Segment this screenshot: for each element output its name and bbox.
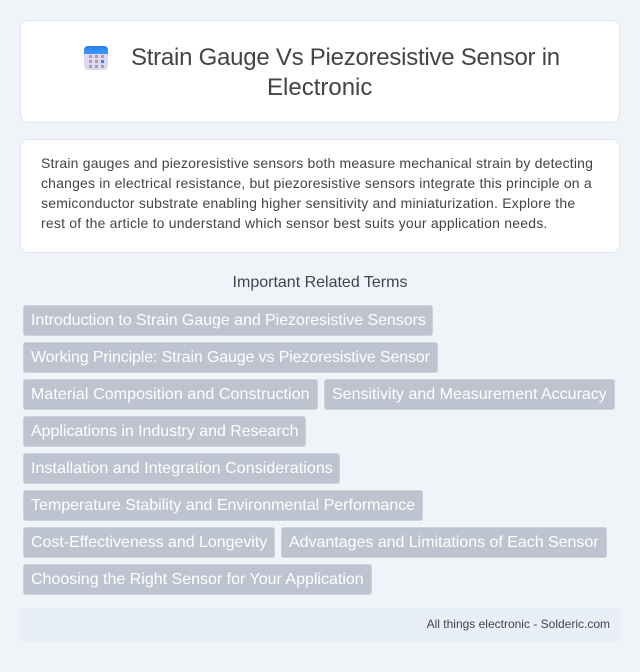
tag [281, 527, 607, 558]
description text: semiconductor substrate enabling higher sensitivity and miniaturization. Explore the [41, 195, 575, 211]
tag: Choosing the Right Sensor for Your Application [31, 571, 364, 588]
tag: Introduction to Strain Gauge and Piezoresistive Sensors [31, 312, 426, 329]
tag: Applications in Industry and Research [31, 423, 298, 440]
description card [20, 139, 620, 253]
description text: changes in electrical resistance, but piezoresistive sensors integrate this principle on a [41, 175, 592, 191]
tag [23, 379, 318, 410]
tag: Sensitivity and Measurement Accuracy [332, 386, 607, 403]
section heading: Important Related Terms [233, 274, 407, 291]
description text [41, 155, 593, 231]
title card [20, 20, 620, 123]
description text: rest of the article to understand which sensor best suits your application needs. [41, 215, 548, 231]
tag: Temperature Stability and Environmental Performance [31, 497, 415, 514]
title: Electronic [267, 74, 372, 101]
description text: Strain gauges and piezoresistive sensors both measure mechanical strain by detecting [41, 155, 593, 171]
tag [23, 453, 340, 484]
title [131, 44, 560, 101]
tag: Material Composition and Construction [31, 386, 310, 403]
footer bar [20, 608, 620, 642]
tag: Installation and Integration Considerations [31, 460, 333, 477]
tag [23, 527, 275, 558]
tag: Cost-Effectiveness and Longevity [31, 534, 267, 551]
tag: Advantages and Limitations of Each Sensor [289, 534, 599, 551]
tag [23, 342, 438, 373]
tag: Working Principle: Strain Gauge vs Piezoresistive Sensor [31, 349, 430, 366]
tag [23, 490, 423, 521]
title: Strain Gauge Vs Piezoresistive Sensor in [131, 44, 560, 71]
tag [23, 416, 306, 447]
tag list [23, 305, 615, 595]
icon: calendar [84, 46, 108, 70]
tag [23, 305, 433, 336]
tag [23, 564, 372, 595]
footer text: All things electronic - Solderic.com [427, 617, 610, 631]
tag [324, 379, 615, 410]
